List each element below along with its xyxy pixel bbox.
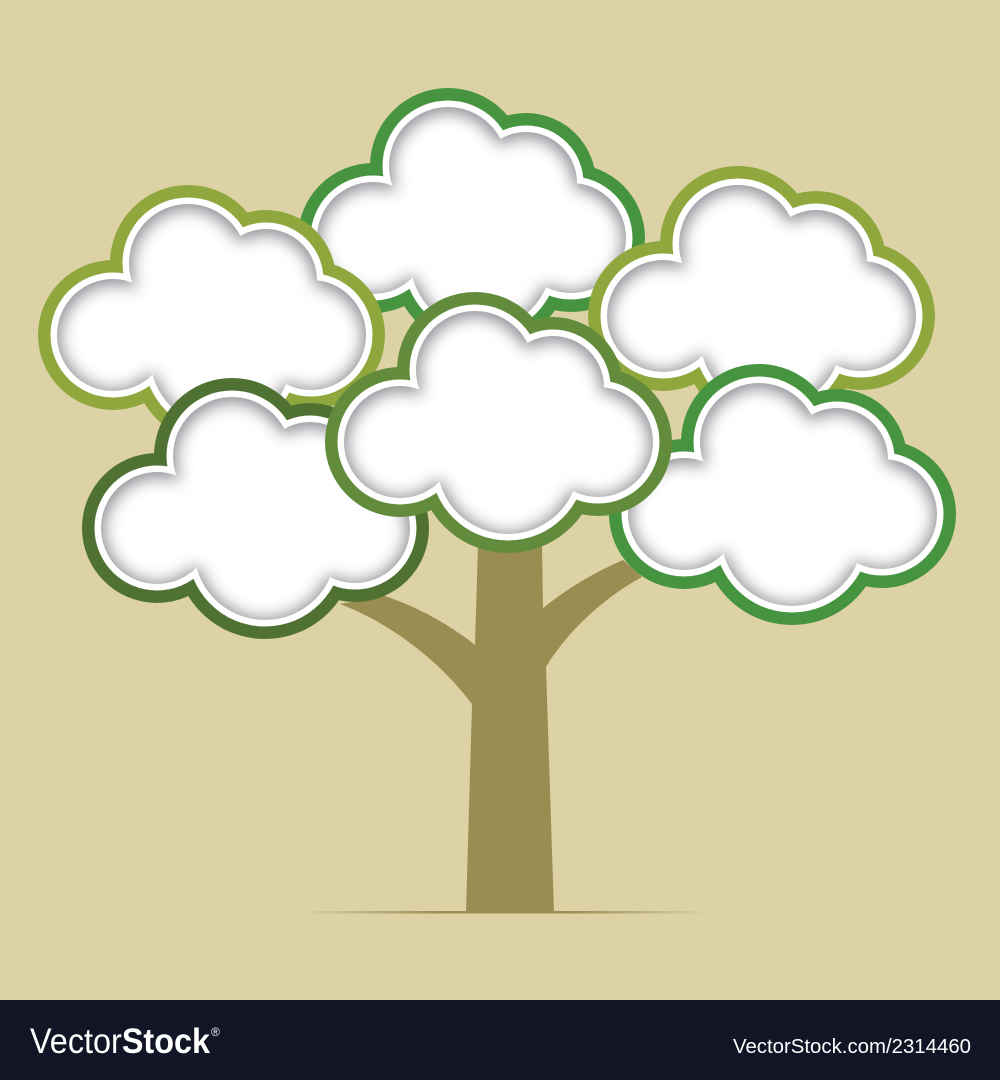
footer logo: VectorStock [30,1022,210,1061]
cloud: lower left [82,378,429,639]
footer registered mark: ® [211,1025,220,1039]
ground shadow line [300,911,710,914]
tree trunk and branches [340,545,642,913]
cloud: top [298,88,645,349]
cloud: lower right [609,364,956,625]
footer bar [0,1000,1000,1080]
cloud: upper left [38,185,385,446]
cloud: center [325,292,672,553]
footer image id: VectorStock.com/2314460 [733,1036,971,1058]
cloud: upper right [588,166,935,427]
